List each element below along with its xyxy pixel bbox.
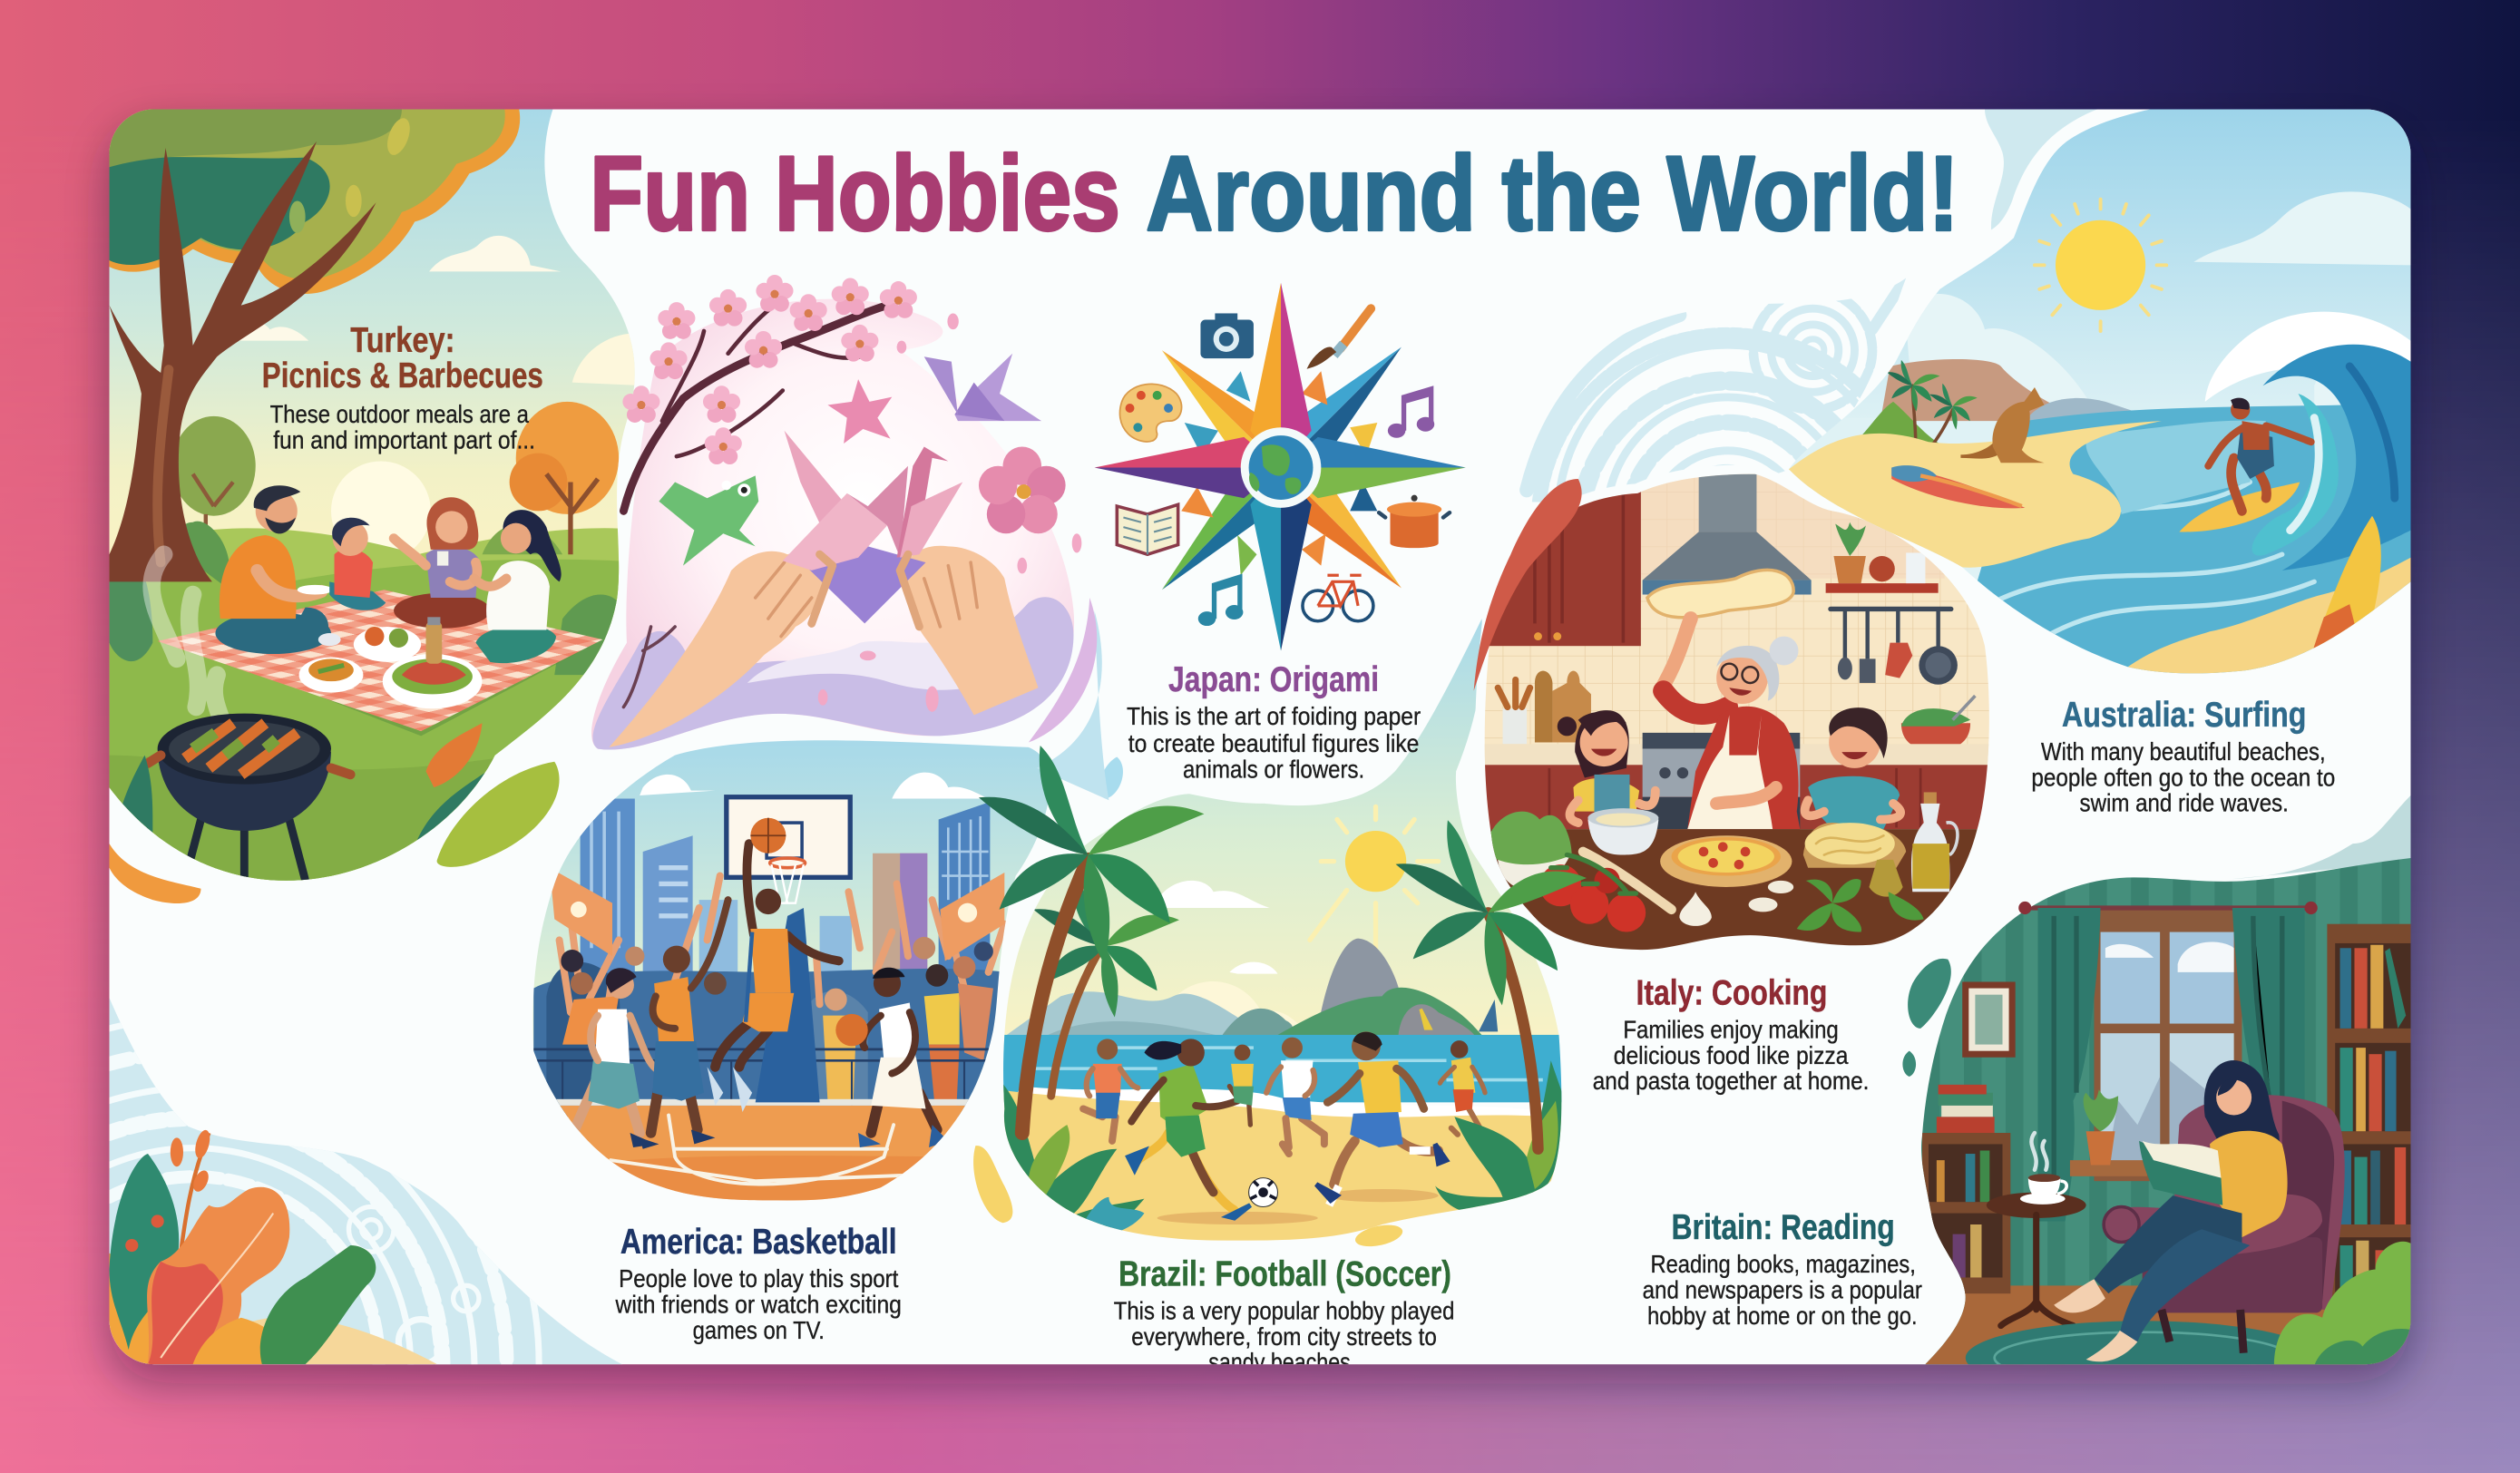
tribal pattern top bbox=[1519, 278, 1906, 502]
panel: Japan origami illustration bbox=[591, 275, 1081, 750]
sub: right bookcase bbox=[2327, 924, 2416, 1302]
sub: surfer bbox=[2179, 398, 2311, 532]
sub: framed picture bbox=[1962, 981, 2016, 1058]
sub: shelf bbox=[1826, 522, 1939, 593]
text block: Britain: and newspapers is a popular bbox=[1643, 1275, 1922, 1303]
panel: Brazil football illustration bbox=[989, 610, 1583, 1254]
sub: diagonal points bbox=[1162, 347, 1402, 590]
text block: America: America: Basketball bbox=[620, 1223, 897, 1262]
sub: player in orange tank bbox=[640, 900, 728, 1149]
sub: counter and cabinets bbox=[1479, 744, 2001, 829]
text block: Japan bbox=[1127, 660, 1421, 783]
text block: America: with friends or watch exciting bbox=[615, 1290, 902, 1318]
sub: players bbox=[1083, 1031, 1485, 1218]
panel: Australia surfing illustration bbox=[1768, 109, 2427, 691]
text block: Australia: With many beautiful beaches, bbox=[2041, 737, 2326, 766]
text block: Turkey bbox=[262, 321, 543, 454]
text block: Japan: to create beautiful figures like bbox=[1128, 729, 1419, 757]
sub: foliage bbox=[996, 1060, 1563, 1241]
text block: Italy: delicious food like pizza bbox=[1614, 1041, 1849, 1069]
panel: Turkey picnic illustration bbox=[109, 109, 656, 900]
decorative: olive leaf bbox=[437, 762, 560, 867]
sub: garlic bbox=[1679, 881, 1793, 926]
text block: Britain bbox=[1643, 1208, 1922, 1330]
sub: dough bbox=[1647, 570, 1793, 618]
text block: Japan: animals or flowers. bbox=[1183, 755, 1364, 783]
sub: grill bbox=[148, 714, 350, 881]
text block: Turkey: These outdoor meals are a bbox=[270, 400, 530, 428]
sub: paper crane bbox=[783, 431, 962, 623]
text block: Australia: people often go to the ocean to bbox=[2031, 763, 2335, 791]
sub: flags bbox=[550, 868, 1004, 961]
sub: rug bbox=[1966, 1321, 2320, 1395]
text block: Italy bbox=[1593, 973, 1869, 1095]
palm: right tree crown bbox=[1396, 820, 1587, 1005]
sub: food bbox=[299, 617, 483, 708]
sub: globe bbox=[1241, 427, 1321, 508]
decorative: yellow swoosh left bbox=[973, 1146, 1012, 1223]
palm: left tree bbox=[979, 746, 1204, 1133]
text block: Turkey: Picnics & Barbecues bbox=[262, 356, 543, 395]
text block: Australia: Australia: Surfing bbox=[2062, 696, 2306, 735]
sub: tree canopy bbox=[109, 109, 520, 294]
sub: small triangles bbox=[1181, 371, 1377, 575]
sub: fingers bbox=[812, 554, 919, 627]
sub: petals bbox=[818, 313, 1081, 712]
text block: Brazil: This is a very popular hobby played bbox=[1114, 1297, 1454, 1325]
sub: skyline bbox=[581, 798, 991, 973]
sub: pizza bbox=[1660, 835, 1792, 887]
sub: headland bbox=[1848, 359, 2170, 450]
text block: America: games on TV. bbox=[693, 1316, 825, 1344]
sub: greens bowl bbox=[1487, 812, 1572, 889]
sub: basil bbox=[1797, 879, 1924, 932]
sub: court bbox=[523, 1099, 1069, 1221]
sub: pasta bbox=[1803, 823, 1906, 868]
text block: Italy: and pasta together at home. bbox=[1593, 1067, 1869, 1095]
text block: Australia: swim and ride waves. bbox=[2080, 789, 2289, 817]
text block: Turkey: Turkey: bbox=[350, 321, 454, 360]
panel: Italy kitchen illustration bbox=[1479, 466, 2001, 964]
sub: mixing bowl bbox=[1587, 808, 1658, 855]
sub: pink flower bbox=[979, 447, 1066, 533]
sub: olive oil bottles bbox=[1869, 792, 1958, 897]
sub: purple music note bbox=[1388, 385, 1434, 438]
sub: small palm bbox=[1033, 876, 1179, 1096]
sub: sand bbox=[996, 1089, 1567, 1254]
sub: counter utensils bbox=[1498, 671, 1975, 750]
sub: paintbrush icon bbox=[1310, 308, 1371, 366]
card bbox=[109, 109, 2411, 1364]
sub: smoke bbox=[151, 554, 227, 756]
text block: America bbox=[615, 1223, 902, 1344]
sub: jumping player bbox=[708, 818, 839, 1112]
title part: Fun Hobbies: Fun Hobbies bbox=[590, 133, 1120, 252]
sub: family bbox=[215, 485, 562, 663]
pale blue shape top right bbox=[1985, 109, 2097, 229]
sub: floor bbox=[1912, 1285, 2427, 1382]
sub: sun bbox=[2035, 200, 2166, 331]
text block: Italy: Families enjoy making bbox=[1623, 1015, 1839, 1043]
sub: wave bbox=[2205, 312, 2411, 571]
sub: open book icon bbox=[1117, 504, 1178, 554]
text block: Australia bbox=[2031, 696, 2335, 817]
sub: origami frog bbox=[659, 475, 758, 566]
sub: ball bbox=[1249, 1178, 1277, 1207]
sub: tomatoes bbox=[1539, 855, 1646, 932]
panel: America basketball illustration bbox=[533, 740, 1048, 1201]
title part: Around the World!: Around the World! bbox=[1146, 133, 1959, 252]
sub: cherry branch bbox=[622, 275, 917, 707]
sub: player with ball bbox=[835, 968, 948, 1147]
sub: cardinal points bbox=[1095, 283, 1466, 651]
sub: bicycle icon bbox=[1303, 575, 1373, 621]
sub: woman reading bbox=[2054, 1060, 2288, 1361]
sub: background blob bbox=[591, 299, 1074, 750]
sub: purple crane bbox=[924, 354, 1041, 421]
sub: rolling pin bbox=[1583, 852, 1672, 910]
sub: sea bbox=[989, 1035, 1583, 1102]
text block: Britain: Reading books, magazines, bbox=[1651, 1250, 1916, 1278]
sub: clouds bbox=[1904, 191, 2411, 425]
text block: Britain: Britain: Reading bbox=[1672, 1208, 1895, 1247]
sub: sea bbox=[1945, 402, 2427, 691]
text block: Brazil: everywhere, from city streets to bbox=[1131, 1322, 1437, 1351]
sub: plant on sill bbox=[2070, 1089, 2147, 1176]
sub: hoop bbox=[727, 797, 850, 1102]
text block: Britain: hobby at home or on the go. bbox=[1647, 1302, 1918, 1330]
sub: lower sand bbox=[2128, 558, 2411, 691]
sub: kangaroo bbox=[1960, 387, 2045, 463]
tribal pattern bottom left bbox=[109, 998, 622, 1364]
sub: table bbox=[1479, 829, 1993, 964]
sub: sun bbox=[1310, 806, 1439, 948]
sub: boy bbox=[1805, 707, 1900, 829]
sub: player in white tank bbox=[562, 968, 656, 1147]
text block: Brazil bbox=[1114, 1254, 1454, 1376]
sub: blue music note bbox=[1198, 573, 1243, 626]
sub: curtain rod bbox=[2025, 906, 2311, 909]
decorative: blue droplet bbox=[1103, 756, 1123, 798]
sub: window bbox=[2094, 908, 2242, 1181]
decorative: lilac sliver sky bbox=[1037, 610, 1109, 800]
panel: Britain reading illustration bbox=[1912, 852, 2427, 1395]
text block: America: People love to play this sport bbox=[619, 1264, 899, 1293]
text block: Turkey: fun and important part of... bbox=[273, 425, 535, 454]
sub: side table and tea bbox=[1987, 1133, 2086, 1326]
sub: cooking pot icon bbox=[1379, 495, 1450, 548]
sub: hands bbox=[609, 546, 1039, 747]
sub: standing surfboard bbox=[2311, 516, 2381, 656]
sub: beach bbox=[1789, 421, 2162, 568]
pale teal shape above Britain bbox=[2232, 795, 2411, 879]
text block: Brazil: sandy beaches. bbox=[1208, 1348, 1356, 1376]
text block: Brazil: Brazil: Football (Soccer) bbox=[1118, 1254, 1451, 1293]
sub: crowd bbox=[533, 876, 1004, 1117]
text block: Japan: Japan: Origami bbox=[1168, 660, 1379, 699]
decorative: yellow oval bbox=[1353, 1221, 1404, 1250]
sub: origami star bbox=[827, 379, 892, 444]
decorative: lilac swoosh bbox=[1029, 598, 1097, 743]
palm: right tree bbox=[1489, 912, 1538, 1149]
decorative: lower left foliage bbox=[109, 1128, 437, 1364]
sub: palette icon bbox=[1120, 384, 1182, 442]
sub: foreground bush bbox=[2274, 1242, 2418, 1374]
decorative: teal blobs bbox=[1902, 959, 1951, 1077]
title bbox=[590, 133, 1959, 252]
sub: lilac hills bbox=[592, 597, 1073, 750]
text block: Japan: This is the art of foiding paper bbox=[1127, 702, 1421, 730]
sub: hood bbox=[1643, 474, 1812, 595]
sub: stove bbox=[1643, 733, 1800, 829]
compass rose with hobby icons bbox=[1095, 283, 1466, 651]
sub: camera icon bbox=[1200, 313, 1254, 358]
sub: upper cabinets bbox=[1487, 482, 1641, 646]
sub: curtain rod finials bbox=[2018, 902, 2318, 914]
sub: armchair bbox=[2104, 1095, 2345, 1353]
sub: lighter hills bbox=[747, 619, 1016, 690]
sub: curtains bbox=[2037, 908, 2305, 1221]
sub: grandmother bbox=[1660, 619, 1800, 829]
sub: mountains bbox=[1004, 939, 1498, 1037]
decorative: orange swoosh bbox=[109, 844, 200, 903]
sub: hanging utensils bbox=[1831, 609, 1958, 685]
sub: girl bbox=[1558, 710, 1656, 829]
decorative: red swoosh bbox=[1474, 479, 1582, 691]
sub: left shelf bbox=[1922, 1085, 2010, 1293]
text block: Italy: Italy: Cooking bbox=[1636, 973, 1827, 1012]
sub: surfboard on sand bbox=[1891, 465, 2025, 508]
